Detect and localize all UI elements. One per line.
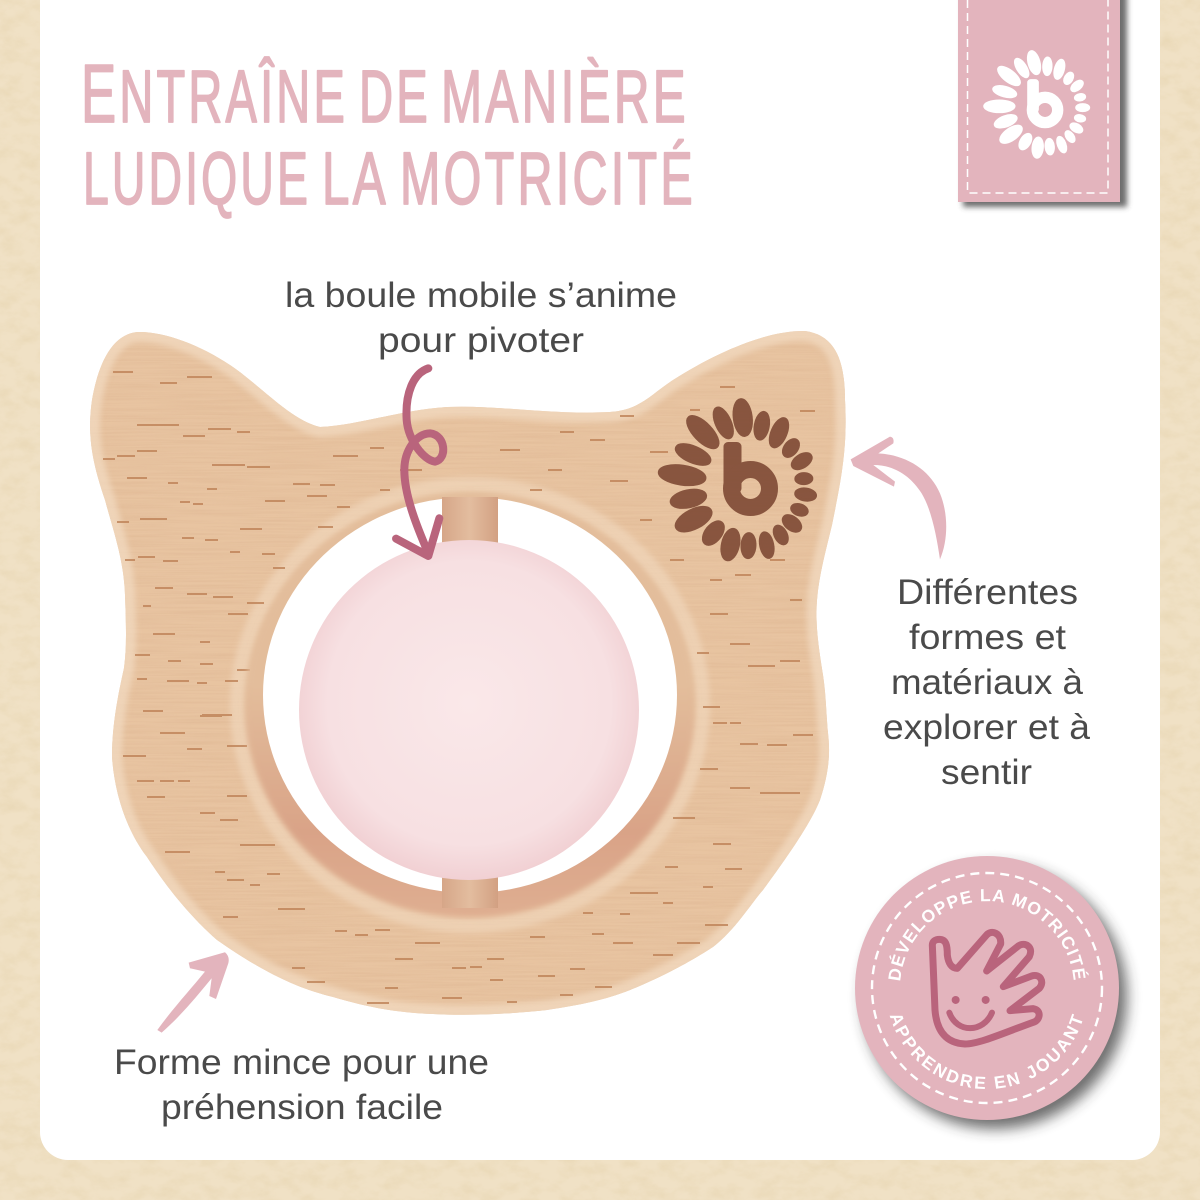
wood grain flecks <box>103 372 815 1003</box>
top axle <box>442 497 498 552</box>
bottom axle <box>442 868 498 908</box>
label: slim shape: préhension facile <box>161 1088 443 1127</box>
badge text: top: DÉVELOPPE LA MOTRICITÉ <box>888 889 1089 980</box>
icon: smiling hand <box>932 932 1042 1044</box>
hole opening <box>263 497 677 893</box>
label: shapes and materials: sentir <box>941 753 1032 792</box>
label: rotating ball: pour pivoter <box>378 321 584 360</box>
title: LUDIQUE <box>83 137 311 220</box>
label: shapes and materials: explorer et à <box>883 708 1091 747</box>
title: DE <box>359 55 431 138</box>
label: shapes and materials <box>883 573 1091 792</box>
product: wooden cat teether <box>80 320 860 1030</box>
label: shapes and materials: Différentes <box>897 573 1078 612</box>
label: rotating ball: la boule mobile s’anime <box>285 276 677 315</box>
pink rotating ball <box>299 540 639 880</box>
label: slim shape: Forme mince pour une <box>114 1043 489 1082</box>
arrow: to logo <box>851 437 946 559</box>
hole inner wall <box>245 493 695 917</box>
title: MOTRICITÉ <box>400 137 696 220</box>
brand tag <box>958 0 1127 207</box>
title: LA <box>322 137 389 220</box>
arrow: to slim edge <box>157 952 229 1033</box>
title: ENTRAÎNE <box>81 47 348 140</box>
title <box>81 47 696 220</box>
badge text: bottom: APPRENDRE EN JOUANT <box>890 1014 1082 1089</box>
engraved logo <box>648 388 828 571</box>
arrow: loop to ball <box>396 368 443 556</box>
label: slim shape <box>114 1043 489 1127</box>
label: shapes and materials: matériaux à <box>891 663 1084 702</box>
label: rotating ball <box>285 276 677 360</box>
label: shapes and materials: formes et <box>909 618 1066 657</box>
icon: brand logo <box>984 50 1089 158</box>
title: MANIÈRE <box>441 55 689 138</box>
badge: motor skills <box>852 854 1138 1140</box>
